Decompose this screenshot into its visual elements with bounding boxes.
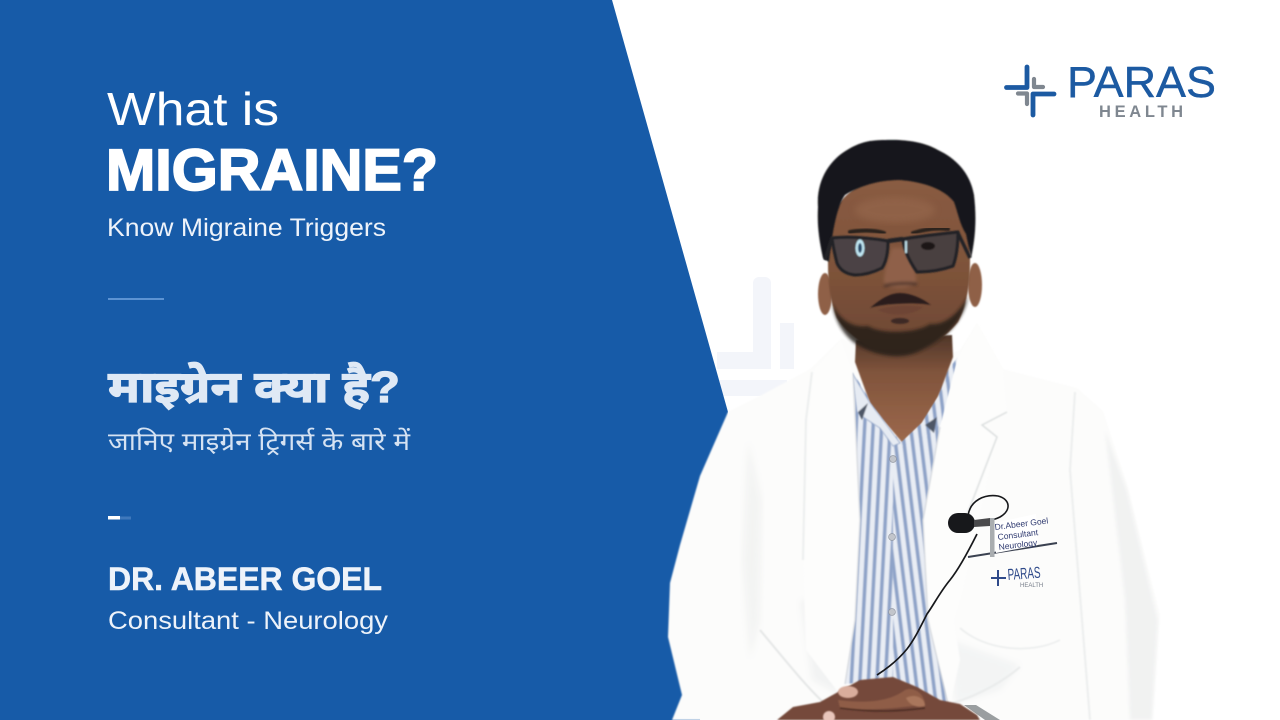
subheading: Hindi subtitle: जानिए माइग्रेन ट्रिगर्स के बारे में bbox=[108, 426, 411, 456]
heading: MIGRAINE?: MIGRAINE? bbox=[106, 138, 438, 203]
doctor figure bbox=[668, 140, 1160, 720]
logo wordmark: PARAS bbox=[1067, 58, 1216, 107]
watermark: faint cross behind doctor bbox=[717, 277, 794, 396]
clasped hands bbox=[777, 677, 980, 720]
panel: Hindi title block bbox=[108, 361, 411, 456]
right lens bbox=[903, 232, 958, 272]
coat lapels bbox=[803, 323, 1007, 704]
coat embroidered logo: PARAS bbox=[1007, 565, 1041, 584]
coat shading bbox=[742, 440, 762, 660]
heading: Hindi title: माइग्रेन क्या है? bbox=[108, 361, 400, 412]
eye reflections bbox=[856, 240, 864, 256]
left lens bbox=[832, 237, 888, 275]
badge text: department: Consultant bbox=[997, 527, 1039, 542]
beard bbox=[832, 296, 968, 356]
coat embroidered logo: HEALTH bbox=[1020, 583, 1043, 589]
hair bbox=[818, 140, 975, 262]
lapel shadow lines bbox=[965, 412, 1007, 520]
finger highlights and nails bbox=[823, 686, 925, 720]
microphone and cable bbox=[877, 496, 1008, 675]
nose bbox=[884, 248, 917, 288]
divider line bbox=[108, 298, 164, 300]
neck bbox=[855, 335, 953, 442]
logo: Paras Health bbox=[1006, 58, 1216, 121]
badge text: Dr.Abeer Goel bbox=[994, 515, 1049, 532]
face bbox=[828, 172, 970, 358]
sleeve edges bbox=[760, 630, 823, 702]
forehead highlight bbox=[855, 197, 935, 223]
moustache and mouth bbox=[870, 293, 931, 324]
coat embroidered logo bbox=[991, 565, 1043, 589]
watch band bbox=[964, 705, 1000, 720]
panel: blue angled background bbox=[0, 0, 728, 720]
ears bbox=[818, 263, 982, 315]
shirt right panel bbox=[893, 357, 958, 704]
heading: What is: What is bbox=[107, 83, 279, 135]
shirt left panel bbox=[845, 373, 896, 684]
panel: doctor name block bbox=[108, 561, 389, 635]
panel: English title block bbox=[106, 83, 438, 242]
eyebrows bbox=[850, 229, 948, 233]
shirt collar bbox=[852, 357, 958, 447]
doctor name: DR. ABEER GOEL bbox=[108, 561, 382, 597]
doctor title: Consultant - Neurology bbox=[108, 607, 389, 635]
badge and pocket bbox=[968, 514, 1057, 589]
short dash bbox=[108, 516, 131, 520]
icon: logo cross bbox=[1006, 67, 1054, 115]
logo tagline: HEALTH bbox=[1099, 103, 1183, 121]
shirt buttons bbox=[889, 456, 896, 615]
badge text: specialty: Neurology bbox=[998, 537, 1038, 552]
lab coat bbox=[668, 323, 1160, 720]
shirt bbox=[845, 357, 958, 704]
subheading: Know Migraine Triggers: Know Migraine Triggers bbox=[107, 214, 386, 242]
glasses bbox=[825, 232, 970, 275]
